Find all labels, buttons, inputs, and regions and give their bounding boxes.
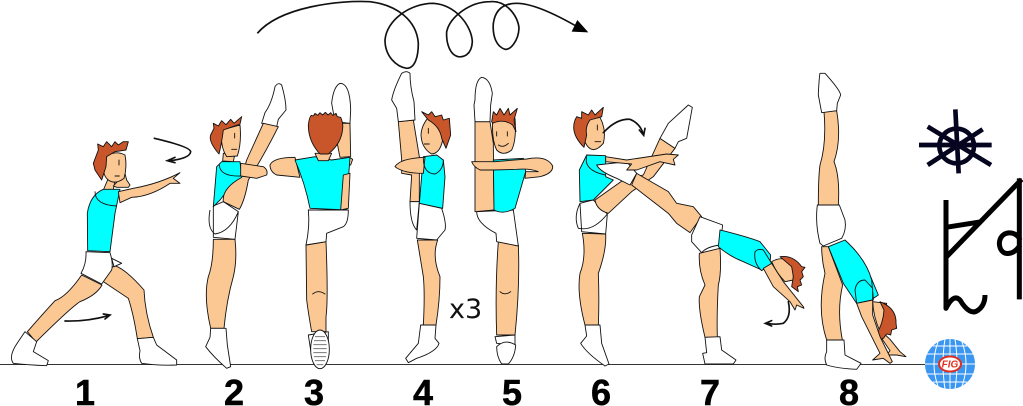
near arm bbox=[857, 300, 892, 363]
x3 repetition label: x3 bbox=[449, 294, 482, 325]
upper leg bbox=[818, 111, 839, 205]
shorts bbox=[81, 252, 122, 284]
shirt bbox=[419, 155, 445, 208]
neck bbox=[103, 178, 115, 190]
figure 4: side view, leg up front bbox=[392, 72, 451, 363]
figure 3: back view bbox=[270, 83, 353, 369]
hair bbox=[876, 302, 897, 340]
shorts bbox=[576, 200, 607, 234]
figure 6: arm and head bbox=[574, 107, 678, 170]
sleeve arc bbox=[219, 165, 241, 176]
arm bbox=[606, 154, 678, 170]
sleeve arc bbox=[423, 158, 443, 174]
shorts bbox=[417, 203, 445, 240]
raised leg bbox=[398, 120, 419, 202]
hair from behind bbox=[308, 112, 343, 154]
shorts bbox=[209, 202, 238, 239]
knee crease bbox=[500, 292, 511, 294]
shorts bbox=[477, 210, 518, 246]
figure 2: side split kick bbox=[206, 84, 286, 368]
shirt bbox=[493, 158, 526, 212]
standing foot bbox=[406, 325, 439, 363]
head bbox=[221, 125, 240, 157]
face bbox=[115, 160, 119, 176]
face bbox=[232, 133, 237, 149]
sleeve line bbox=[95, 192, 117, 206]
sleeve arc bbox=[586, 157, 605, 175]
spiral flight arrow bbox=[257, 1, 588, 68]
shoe sole bbox=[311, 330, 329, 369]
head bbox=[873, 302, 887, 332]
standing leg bbox=[699, 248, 721, 337]
raised foot bbox=[392, 72, 415, 122]
shirt bbox=[295, 157, 350, 210]
upper foot bbox=[818, 73, 841, 113]
lower rotation arrow bbox=[65, 314, 110, 321]
shorts bbox=[817, 205, 845, 246]
neck bbox=[223, 153, 235, 162]
raised leg bbox=[475, 122, 494, 212]
folded arms bbox=[472, 158, 553, 178]
standing leg bbox=[206, 239, 236, 328]
raised foot bbox=[660, 105, 692, 148]
shirt bbox=[579, 155, 613, 202]
standing foot bbox=[825, 340, 861, 369]
raised foot bbox=[332, 83, 351, 123]
head bbox=[421, 117, 443, 154]
shorts bbox=[692, 217, 723, 253]
sole pattern bbox=[313, 337, 327, 365]
head bbox=[583, 117, 604, 150]
FIG globe logo: FIG bbox=[942, 360, 959, 370]
standing leg bbox=[306, 242, 327, 332]
hair bbox=[574, 107, 603, 147]
head bbox=[103, 153, 126, 182]
standing foot bbox=[581, 325, 609, 366]
standing foot bbox=[206, 328, 231, 368]
raised leg bbox=[632, 173, 702, 233]
standing leg bbox=[496, 242, 519, 335]
FIG globe logo bbox=[925, 339, 975, 389]
shorts bbox=[306, 210, 348, 245]
head bbox=[772, 259, 793, 282]
shorts back bbox=[410, 202, 419, 230]
arm bbox=[241, 163, 267, 178]
symbol: spoked wheel bbox=[919, 109, 992, 173]
face bbox=[424, 128, 429, 144]
near hand bbox=[113, 173, 130, 187]
hair bbox=[93, 142, 128, 180]
standing foot bbox=[703, 337, 736, 364]
raised leg bbox=[333, 123, 351, 157]
sock bbox=[495, 335, 515, 345]
shirt bbox=[213, 162, 247, 207]
shoe bbox=[497, 342, 516, 364]
sock bbox=[308, 332, 328, 357]
standing leg bbox=[417, 240, 440, 325]
rear leg bbox=[27, 275, 102, 342]
sleeve bbox=[755, 249, 772, 271]
neck bbox=[315, 153, 332, 161]
sleeve bbox=[855, 280, 873, 303]
left arm bbox=[270, 157, 300, 177]
symbol: element notation bbox=[946, 178, 1022, 312]
raised foot bbox=[262, 84, 286, 127]
hair bbox=[780, 256, 805, 292]
raised leg bbox=[223, 123, 278, 209]
figure 7: walkover support bbox=[597, 162, 805, 364]
upper rotation arrow bbox=[154, 138, 191, 163]
figure 6: body and raised leg bbox=[576, 105, 692, 366]
FIG emblem bbox=[939, 356, 961, 372]
figure 5: front view bbox=[472, 77, 553, 364]
figure 1: lunge bbox=[11, 138, 191, 366]
shirt bbox=[718, 230, 771, 270]
arm bbox=[763, 263, 804, 310]
face bbox=[497, 132, 508, 146]
standing leg bbox=[821, 247, 843, 340]
front leg bbox=[103, 266, 153, 339]
figure 8: handstand bridge bbox=[817, 73, 906, 369]
raised foot bbox=[597, 162, 637, 185]
far sleeve bbox=[871, 277, 878, 298]
knee crease bbox=[313, 292, 325, 294]
rear foot bbox=[11, 332, 48, 366]
standing leg bbox=[579, 233, 606, 325]
arrowhead bbox=[572, 20, 588, 32]
hair bbox=[210, 117, 242, 154]
hair bbox=[422, 112, 451, 148]
right arm bbox=[341, 173, 350, 210]
shirt bbox=[87, 189, 120, 252]
step numbers bbox=[75, 372, 859, 406]
front foot bbox=[137, 337, 177, 365]
ground line bbox=[0, 364, 926, 366]
shirt bbox=[828, 240, 873, 303]
head bbox=[492, 118, 515, 153]
raised foot bbox=[474, 77, 492, 122]
far arm bbox=[880, 330, 906, 357]
face bbox=[595, 125, 601, 142]
arm bbox=[118, 173, 180, 203]
arm bbox=[395, 157, 425, 173]
hair bbox=[492, 108, 517, 132]
rotation arrow bbox=[765, 302, 789, 326]
right hand bbox=[347, 157, 353, 165]
rotation arrow bbox=[603, 119, 645, 135]
raised leg bbox=[595, 138, 675, 213]
